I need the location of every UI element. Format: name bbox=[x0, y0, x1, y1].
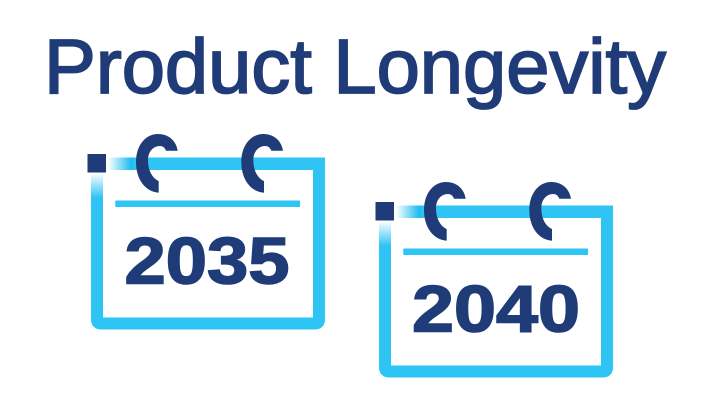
calendar frame bbox=[379, 206, 613, 378]
binder ring right bbox=[241, 134, 283, 193]
binder ring right bbox=[529, 182, 571, 241]
binder ring left bbox=[136, 134, 178, 193]
calendar frame bbox=[91, 158, 325, 330]
binder ring left bbox=[424, 182, 466, 241]
year 2040: 2040 bbox=[412, 271, 580, 345]
calendar: 2035 bbox=[88, 134, 325, 330]
calendar: 2040 bbox=[376, 182, 613, 378]
year 2035: 2035 bbox=[124, 223, 290, 297]
header line bbox=[115, 200, 300, 207]
corner square bbox=[376, 202, 394, 220]
title: Product Longevity bbox=[44, 24, 666, 110]
header line bbox=[403, 248, 588, 255]
corner square bbox=[88, 154, 106, 172]
